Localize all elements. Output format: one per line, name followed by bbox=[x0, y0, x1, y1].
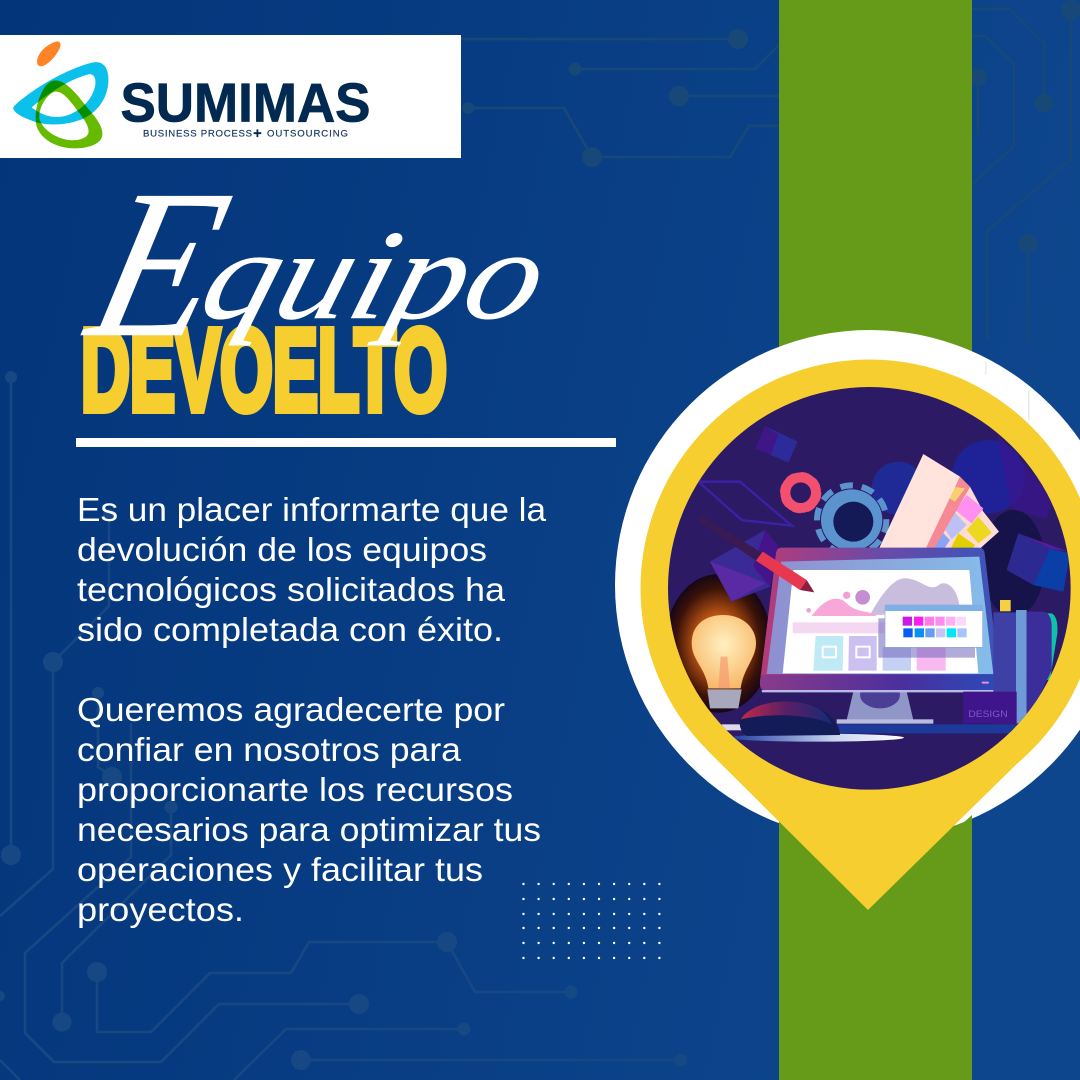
body text: second paragraph: confiar en nosotros para bbox=[77, 731, 462, 768]
floating cube left bbox=[710, 530, 778, 602]
body text: first paragraph: sido completada con éxito. bbox=[77, 611, 503, 648]
title: Equipo script: quipo bbox=[188, 205, 563, 346]
desk surface bbox=[722, 724, 1023, 742]
logo tagline bbox=[143, 125, 348, 142]
spheres bbox=[872, 433, 1053, 617]
computer mouse bbox=[740, 701, 840, 736]
computer monitor bbox=[760, 548, 1000, 724]
circuit pattern: top and right bbox=[461, 0, 1080, 340]
palette window bbox=[885, 605, 983, 647]
logo panel bbox=[0, 35, 461, 158]
glowing light bulb bbox=[665, 574, 772, 713]
white divider bbox=[76, 438, 616, 447]
book label: DESIGN bbox=[968, 709, 1008, 719]
pin yellow point bbox=[707, 750, 1031, 910]
illustration: design workspace bbox=[668, 387, 1071, 790]
digital pen bbox=[697, 516, 814, 592]
green vertical band bbox=[779, 0, 972, 1080]
green band over halo bottom bbox=[779, 815, 972, 1000]
screen hills chart bbox=[806, 578, 960, 616]
body text: second paragraph bbox=[77, 691, 541, 928]
body text: second paragraph: proporcionarte los recursos bbox=[77, 771, 513, 808]
floating cube top bbox=[755, 426, 798, 463]
pin white halo bbox=[615, 330, 1080, 840]
palette window shadow bbox=[878, 618, 975, 658]
map pin with illustration bbox=[615, 330, 1080, 910]
pink gear bbox=[782, 474, 819, 511]
body text: first paragraph: tecnológicos solicitados ha bbox=[77, 571, 506, 608]
dot grid bbox=[524, 884, 662, 958]
screen content band bbox=[793, 622, 886, 633]
screen page bbox=[783, 570, 978, 673]
floating cube right bbox=[1007, 533, 1070, 592]
body text: first paragraph bbox=[77, 491, 547, 648]
logo mark bbox=[13, 41, 108, 148]
body text: first paragraph: devolución de los equipos bbox=[77, 531, 487, 568]
colour swatch fan bbox=[878, 454, 999, 550]
wireframe plane bbox=[698, 482, 792, 526]
title: Equipo script bbox=[69, 146, 563, 381]
screen bevel bbox=[767, 557, 993, 674]
pin yellow ring bbox=[640, 360, 1080, 818]
screen image cards bbox=[813, 636, 946, 671]
body text: first paragraph: Es un placer informarte que la bbox=[77, 491, 547, 528]
logo wordmark: SUMIMAS bbox=[120, 72, 370, 134]
design book bbox=[963, 600, 1057, 723]
logo tagline: BUSINESS PROCESS bbox=[143, 128, 252, 140]
illustration background bbox=[668, 387, 1071, 790]
title: Equipo script: E bbox=[69, 146, 248, 381]
circuit pattern: left and bottom bbox=[0, 371, 688, 1080]
monitor casing bbox=[760, 548, 1000, 691]
logo tagline: + bbox=[253, 125, 262, 142]
body text: second paragraph: operaciones y facilitar tus bbox=[77, 851, 483, 888]
body text: second paragraph: Queremos agradecerte por bbox=[77, 691, 505, 728]
body text: second paragraph: necesarios para optimizar tus bbox=[77, 811, 541, 848]
logo tagline: OUTSOURCING bbox=[267, 128, 348, 140]
title: DEVOELTO: DEVOELTO bbox=[81, 305, 447, 435]
blue gear bbox=[817, 485, 886, 555]
body text: second paragraph: proyectos. bbox=[77, 891, 244, 928]
monitor stand bbox=[836, 692, 934, 724]
monitor bezel bbox=[760, 675, 1000, 692]
